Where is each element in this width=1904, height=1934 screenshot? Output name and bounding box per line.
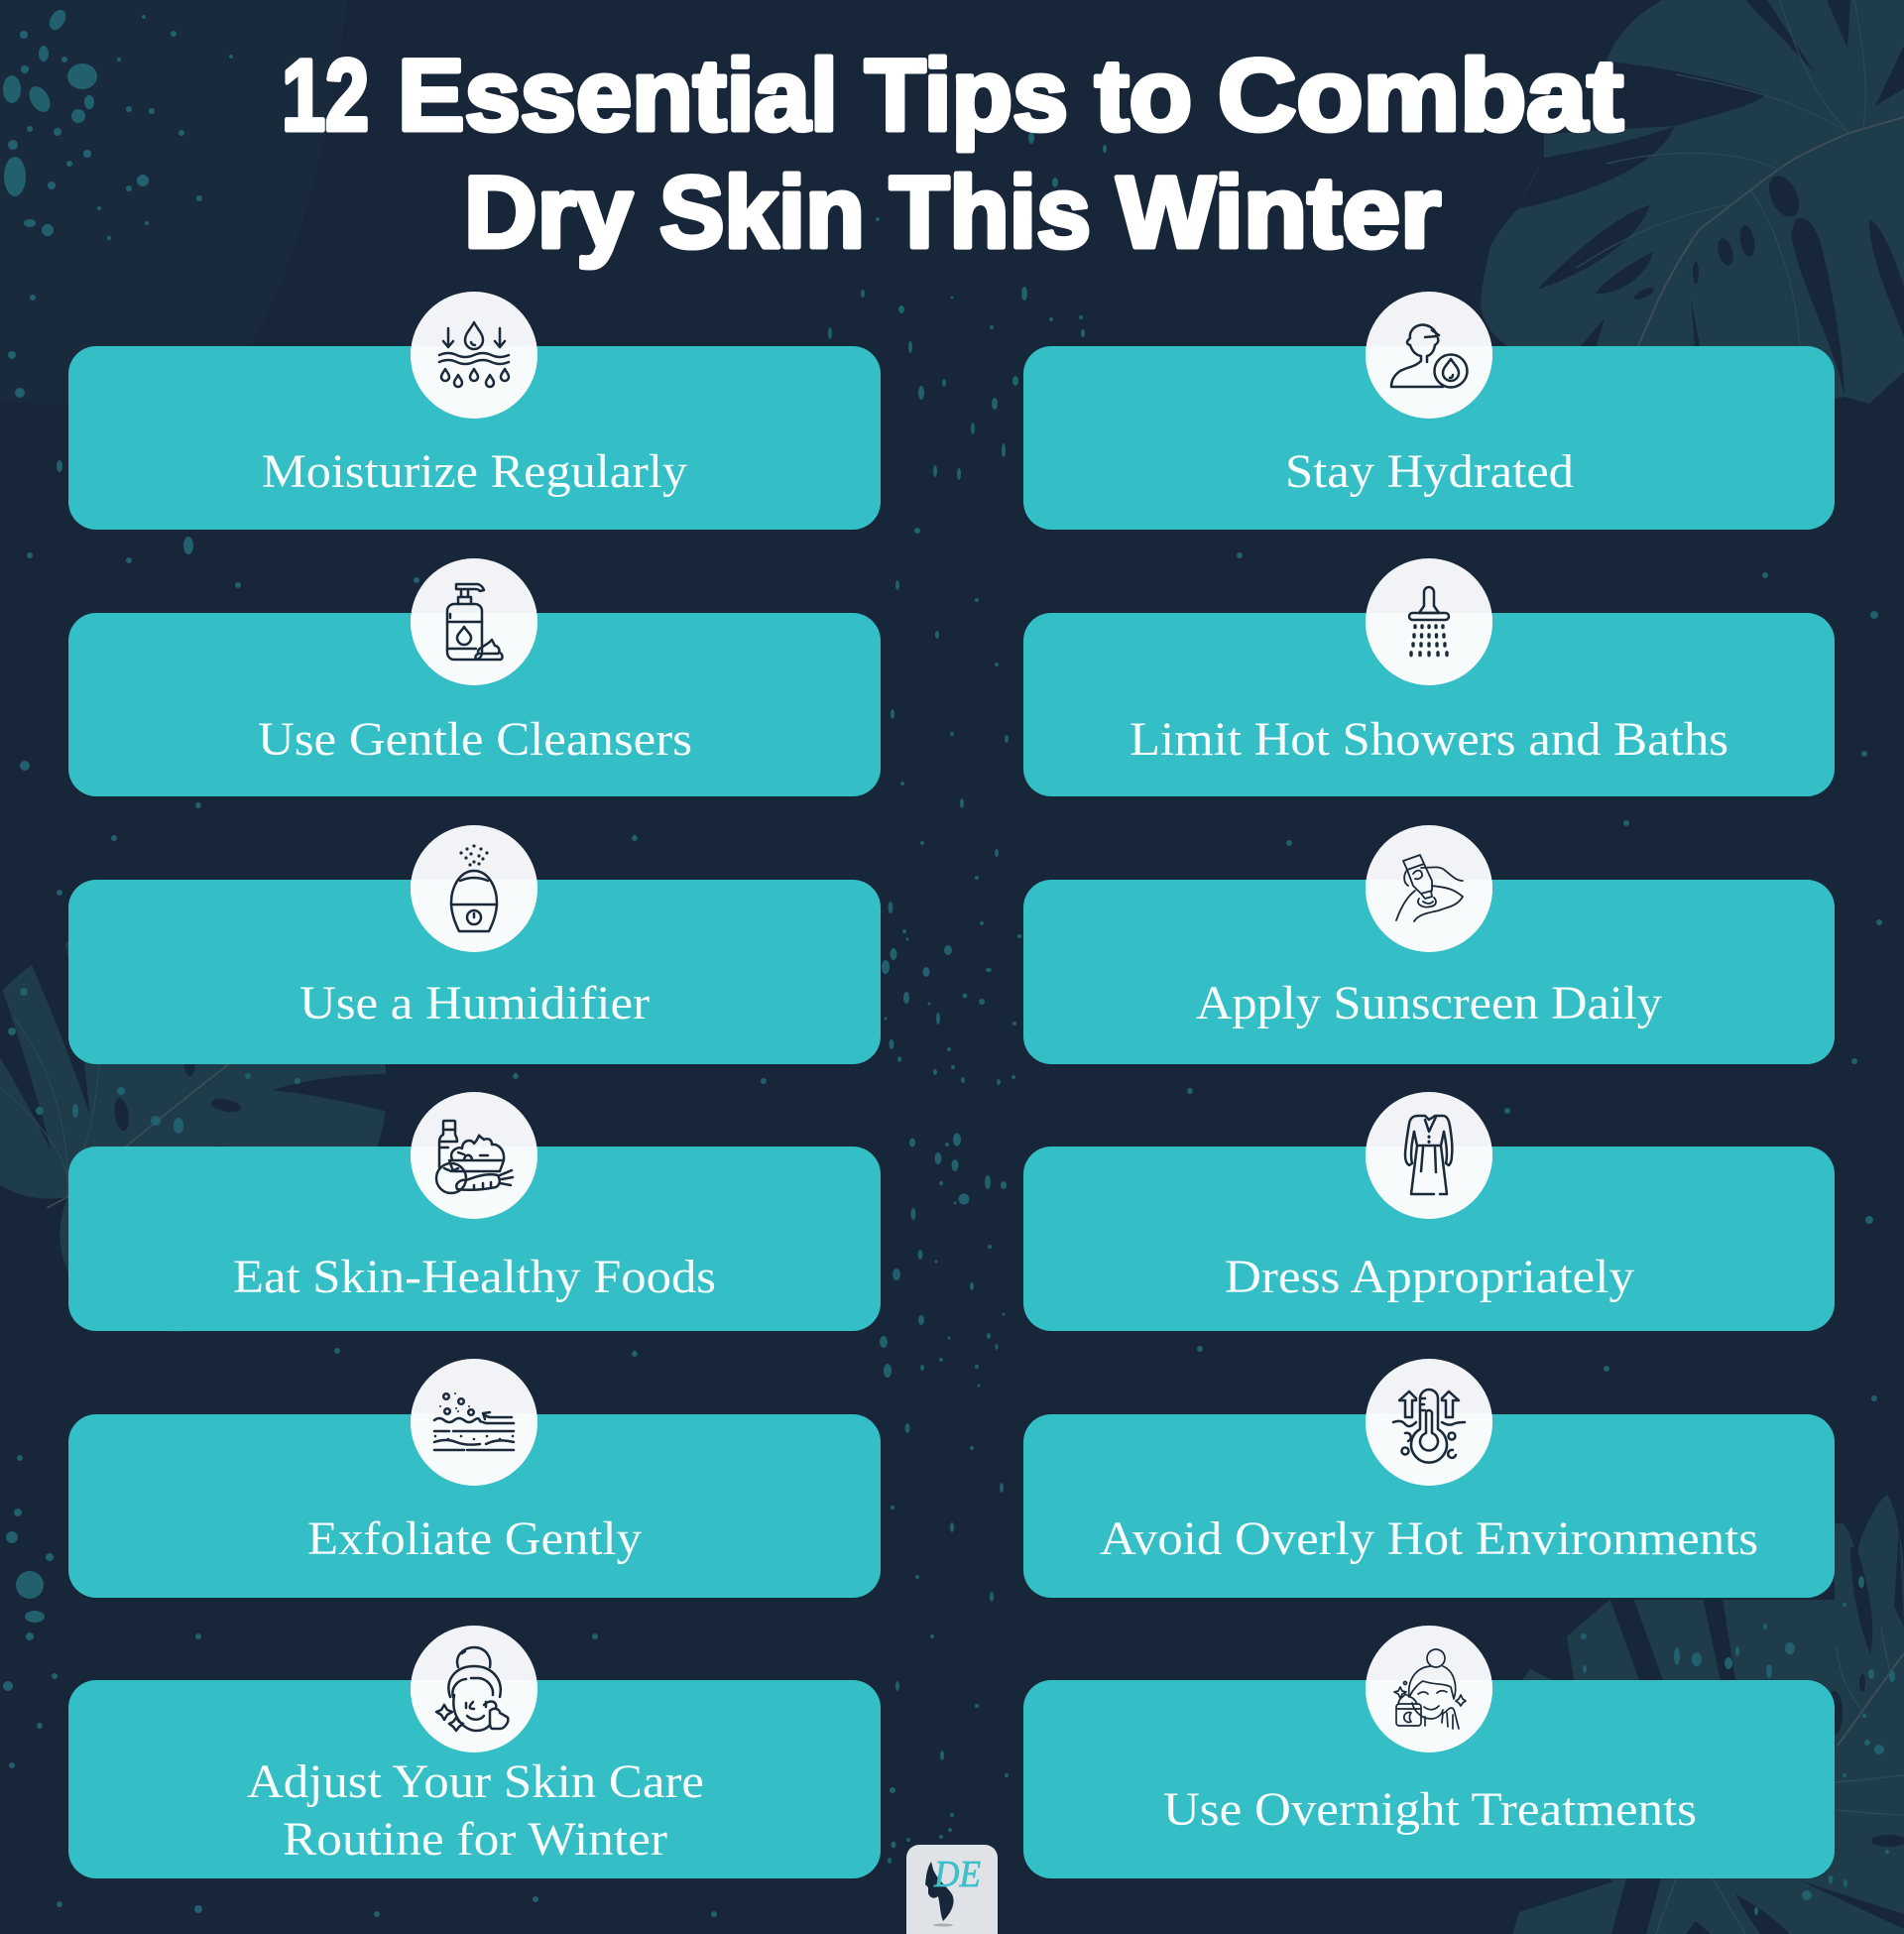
monstera leaf: bottom right (1512, 1495, 1904, 1934)
title: 12 (282, 39, 369, 152)
card: Exfoliate Gently (68, 1414, 881, 1598)
icon: sunscreen hand (1366, 825, 1492, 952)
title: Combat (1218, 39, 1623, 152)
title: Winter (1117, 156, 1441, 269)
icon: healthy foods (411, 1092, 537, 1219)
title: to (1095, 39, 1192, 152)
icon: dress (1366, 1092, 1492, 1219)
card: Stay Hydrated (1023, 346, 1835, 530)
monstera leaf: top right (1481, 0, 1904, 426)
card: Apply Sunscreen Daily (1023, 880, 1835, 1064)
card: Adjust Your Skin Care Routine for Winter: Routine for Winter (283, 1813, 667, 1866)
card: Exfoliate Gently: Exfoliate Gently (307, 1512, 642, 1565)
card: Use Overnight Treatments (1023, 1680, 1835, 1878)
card: Avoid Overly Hot Environments (1023, 1414, 1835, 1598)
icon: shower (1366, 558, 1492, 685)
icon: water drop moisture (411, 292, 537, 419)
card: Use Overnight Treatments: Use Overnight Treatments (1163, 1783, 1697, 1836)
card: Dress Appropriately (1023, 1147, 1835, 1331)
card: Apply Sunscreen Daily: Apply Sunscreen Daily (1196, 977, 1662, 1029)
title: Dry (464, 156, 633, 269)
card: Use a Humidifier: Use a Humidifier (299, 977, 650, 1029)
icon: face care girl (411, 1626, 537, 1753)
icon: cleanser bottle (411, 558, 537, 685)
card: Eat Skin-Healthy Foods (68, 1147, 881, 1331)
card: Use Gentle Cleansers: Use Gentle Cleansers (258, 713, 692, 766)
icon: overnight cream face (1366, 1626, 1492, 1753)
card: Moisturize Regularly (68, 346, 881, 530)
centre (889, 902, 892, 913)
icon: humidifier (411, 825, 537, 952)
icon: person with drop (1366, 292, 1492, 419)
card: Adjust Your Skin Care Routine for Winter: Adjust Your Skin Care (247, 1755, 704, 1808)
card: Moisturize Regularly: Moisturize Regularly (262, 445, 687, 498)
monstera leaf: middle left (0, 941, 387, 1332)
card: Use Gentle Cleansers (68, 613, 881, 796)
bottom right on leaf (1674, 1647, 1680, 1665)
card: Limit Hot Showers and Baths (1023, 613, 1835, 796)
card: Avoid Overly Hot Environments: Avoid Overly Hot Environments (1100, 1512, 1758, 1565)
icon: skin exfoliation (411, 1359, 537, 1486)
title: This (890, 156, 1091, 269)
logo (906, 1845, 998, 1934)
card: Stay Hydrated: Stay Hydrated (1285, 445, 1574, 498)
title (282, 39, 1623, 269)
title: Essential (398, 39, 838, 152)
card: Adjust Your Skin Care Routine for Winter (68, 1680, 881, 1878)
card: Use a Humidifier (68, 880, 881, 1064)
logo: DE (933, 1854, 981, 1895)
icon: thermometer (1366, 1359, 1492, 1486)
title: Tips (865, 39, 1068, 152)
card: Limit Hot Showers and Baths: Limit Hot Showers and Baths (1130, 713, 1728, 766)
title: Skin (659, 156, 865, 269)
card: Eat Skin-Healthy Foods: Eat Skin-Healthy Foods (233, 1251, 716, 1303)
card: Dress Appropriately: Dress Appropriately (1225, 1251, 1634, 1303)
